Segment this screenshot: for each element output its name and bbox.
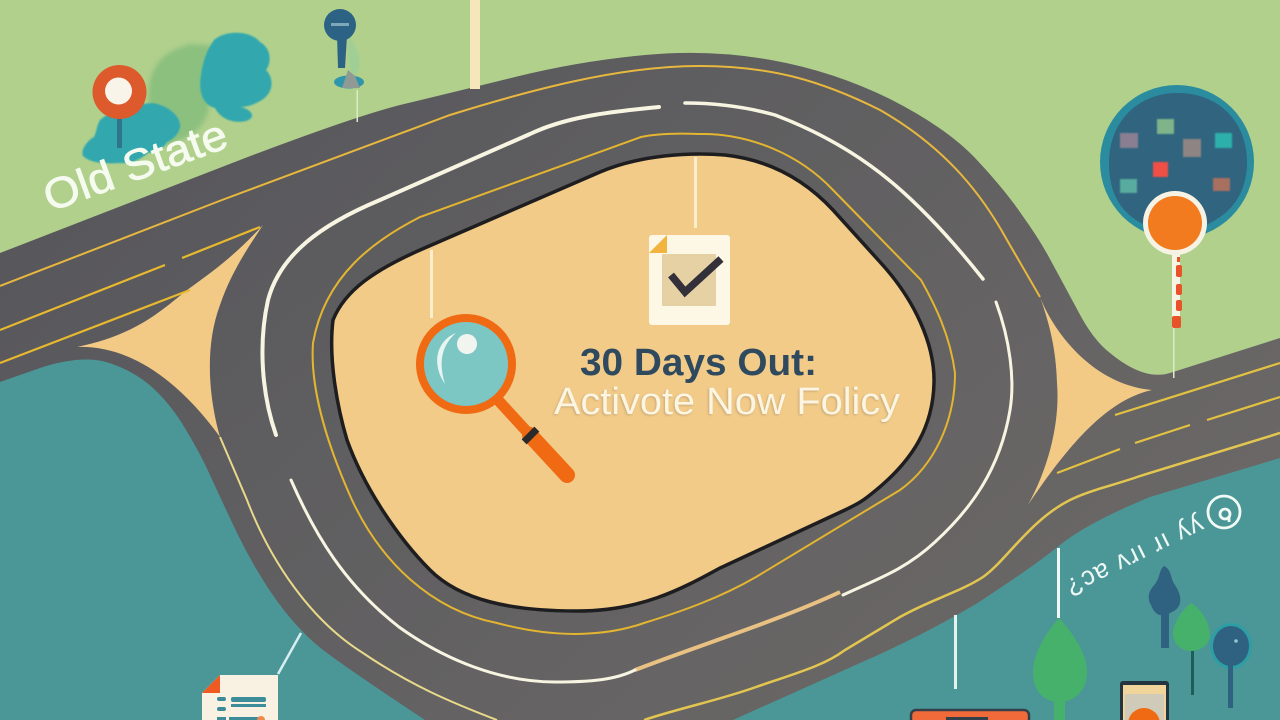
subheading: Activate New Policy: Activote Now Folicy [554,381,900,423]
icon: dark balloon pin [1210,623,1252,708]
icon: dark blue tree [1149,566,1180,648]
white ring line, left and top segment [262,107,659,435]
green blob [148,44,218,145]
icon: map circle with tiles [1100,85,1254,239]
white ring line, right segment [843,302,1012,595]
center tan island [332,154,934,611]
background: teal lower water [0,300,1280,720]
outer yellow lane line, left and bottom [220,437,497,720]
map blobs: green and teal bushes [82,33,272,163]
icon: orange card [911,710,1029,720]
garbled label: lower right: ¿ɔɐ ʌɹı ɹı ʎʎ [1059,507,1207,599]
icon: at-sign ring [1208,496,1240,528]
small teal blob [82,103,180,163]
icon: orange lollipop marker [1143,191,1207,328]
connector line: orange card [954,615,957,689]
white ring line, top right segment [685,103,983,279]
icon: magnifying glass [420,318,567,475]
connector line: magnifier [430,250,433,318]
icon: green tree [1173,603,1210,695]
icon: blue key pin [324,9,364,88]
large teal blob [200,33,272,122]
icon: orange map pin [92,65,146,148]
icon: document with list [202,675,278,720]
heading: 30 Days Out: 30 Days Out: [580,342,817,384]
right lane markings [1057,363,1280,473]
connector line: leaf [1057,548,1060,618]
map tiles [1120,119,1232,193]
connector line: checklist [694,157,697,228]
icon: phone [1120,681,1169,720]
tan road seam [635,592,840,670]
icon: checklist card [649,235,730,325]
connector line: key pin [356,90,358,122]
right tan island [1028,297,1152,505]
connector line: lollipop [1173,328,1174,378]
left tan island [77,225,263,437]
icon: large green leaf tree [1033,618,1087,720]
white ring line, bottom segment [291,480,635,682]
inner yellow lane loop [313,134,955,634]
label: Old State: Old State [37,111,234,221]
connector line: document [278,633,301,674]
outer yellow lane line, top [0,66,1040,297]
connector line: top cream post [470,0,480,89]
outer yellow lane line, lower right [644,433,1280,720]
left lane markings [0,227,260,363]
